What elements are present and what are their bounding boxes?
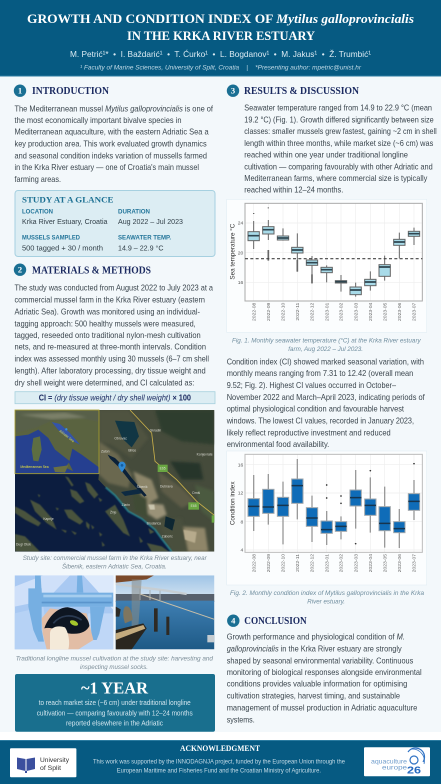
x axis labels: 2023-06 <box>397 302 403 321</box>
text: conclusion paragraph: shaped by seasonal environmental variability. Continuous <box>227 656 413 665</box>
boxes <box>248 227 420 295</box>
location pin <box>118 462 126 472</box>
acknowledgment text: This work was supported by the INNODAGNJA project, funded by the European Union through the <box>93 758 345 765</box>
text: conclusion paragraph: galloprovincialis in the Krka River estuary are strongly <box>227 644 403 653</box>
place labels: Brodarica <box>147 521 161 525</box>
text: conclusion paragraph: management of mussel production in Adriatic aquaculture <box>227 703 418 712</box>
x axis labels: 2023-05 <box>382 554 388 572</box>
text: conclusion paragraph: cultivation strategies, harvest timing, and sustainable <box>227 692 400 701</box>
text: results paragraph: reached within 12–24 months. <box>244 186 343 195</box>
caption: figure 2 <box>230 590 424 605</box>
x axis labels: 2023-03 <box>353 302 359 321</box>
x axis labels: 2022-12 <box>310 554 316 572</box>
text: introduction paragraph: The Mediterranean mussel Mytilus galloprovincialis is one of <box>14 104 214 113</box>
callout text: to reach market size (~6 cm) under traditional longline <box>39 698 191 707</box>
text: condition index paragraph: windows. The lowest CI values, recorded in January 2023, <box>226 416 414 425</box>
x axis labels: 2022-10 <box>281 554 287 572</box>
place labels <box>16 429 213 547</box>
x axis labels: 2022-08 <box>251 554 257 572</box>
place labels: Zaton <box>101 449 110 453</box>
callout text: reported elsewhere in the Adriatic <box>66 718 163 727</box>
place labels: Zaboric <box>162 534 173 538</box>
map: study site <box>15 410 216 552</box>
roads <box>130 410 214 515</box>
callout figure: ~1 YEAR <box>81 678 149 698</box>
text: conclusion paragraph: Growth performance and physiological condition of M. <box>227 633 405 642</box>
caption: figure 1: farm, Aug 2022 – Jul 2023. <box>288 346 363 353</box>
logo: Aquaculture Europe 26 <box>364 747 430 776</box>
section 4: conclusion <box>227 614 422 724</box>
text: methods paragraph: nets, and re-measured at three-month intervals. Condition <box>14 343 206 352</box>
glance: mussels sampled: 500 tagged + 30 / month <box>22 244 103 253</box>
y axis labels: 12 <box>238 491 244 497</box>
text: introduction paragraph: key production area. This work evaluated growth dynamics <box>14 140 207 149</box>
text: condition index paragraph: Condition index (CI) showed marked seasonal variation, with <box>227 357 424 366</box>
caption: figure 2: River estuary. <box>307 598 345 605</box>
glance: duration: Aug 2022 – Jul 2023 <box>118 217 183 226</box>
text: introduction paragraph: in the Krka River estuary — one of Croatia's main mussel <box>14 163 199 172</box>
medians <box>248 230 420 290</box>
glance: mussels sampled: MUSSELS SAMPLED <box>22 235 81 241</box>
caption: cultivation photos <box>16 656 213 671</box>
icon: swirl <box>408 748 425 764</box>
whiskers and outliers <box>254 207 414 297</box>
callout: time to market size <box>15 674 215 732</box>
fingertip <box>50 626 69 649</box>
glance title: STUDY AT A GLANCE <box>22 195 114 205</box>
place labels: Dugi Otok <box>16 543 31 547</box>
text: introduction paragraph: the most economically important bivalve species in <box>14 116 182 125</box>
section 3: results and discussion <box>227 84 437 195</box>
panel: figure 2 condition index chart <box>227 451 427 585</box>
y axis labels: Condition index <box>229 481 236 525</box>
map inset: Italy and Adriatic: Adriatic Sea <box>58 429 75 443</box>
photo: mussel line at the farm <box>116 575 214 649</box>
heading: materials and methods: 2 <box>18 265 22 275</box>
text: conclusion paragraph: systems. <box>227 715 255 724</box>
text: condition index paragraph: November 2022 and March–April 2023, indicating periods of <box>227 393 425 402</box>
caption: figure 1: Fig. 1. Monthly seawater temperature (°C) at the Krka River estuary <box>232 337 421 345</box>
place labels: Skradin <box>150 429 161 433</box>
y axis labels: 16 <box>238 280 244 286</box>
x axis labels: 2022-10 <box>281 302 287 321</box>
bridge <box>116 584 187 594</box>
heading: conclusion: 4 <box>231 616 236 626</box>
text: methods paragraph: length). After laboratory processing, dry tissue weight and <box>14 366 206 375</box>
caption: cultivation photos: Traditional longline mussel cultivation at the study site: harvesting and <box>16 656 213 663</box>
land texture <box>99 410 214 552</box>
heading: conclusion <box>227 614 307 627</box>
glance: duration: DURATION <box>118 210 150 216</box>
place labels: Zlarin <box>122 503 130 507</box>
place labels: Drniš <box>192 491 200 495</box>
text: methods paragraph: tagging approach: 500 healthy mussels were measured, <box>14 319 196 328</box>
text: condition index paragraph: monthly means ranging from 7.31 to 12.42 (overall mean <box>227 369 414 378</box>
formula box: CI = (dry tissue weight / dry shell weight) × 100 <box>39 393 192 402</box>
section 2: materials and methods <box>14 264 215 404</box>
acknowledgment text: European Maritime and Fisheries Fund and the Croatian Ministry of Agriculture. <box>117 768 321 775</box>
road badges: E65 <box>191 504 197 508</box>
title: GROWTH AND CONDITION INDEX OF Mytilus galloprovincialis <box>27 12 414 26</box>
text: methods paragraph: index was assessed monthly using 30 mussels (6–7 cm shell <box>14 355 209 364</box>
place labels: Žirje <box>110 510 117 515</box>
footer: acknowledgment <box>0 740 441 784</box>
logo: Aquaculture Europe 26: 26 <box>407 766 422 776</box>
glance: duration <box>118 210 183 226</box>
logo: Aquaculture Europe 26: aquaculture <box>371 758 407 766</box>
callout text: cultivation — comparing favourably with 12–24 months <box>37 708 193 717</box>
caliper <box>28 575 113 642</box>
x axis labels <box>251 554 418 572</box>
title: IN THE KRKA RIVER ESTUARY <box>127 29 315 43</box>
x axis labels: 2023-02 <box>339 554 345 572</box>
formula box <box>15 392 215 404</box>
glance: seawater temperature: 14.9 – 22.9 °C <box>118 244 164 253</box>
place labels: Kaprije <box>43 517 54 521</box>
caption: study site: Šibenik, eastern Adriatic Sea, Croatia. <box>62 561 167 570</box>
x axis labels: 2023-01 <box>324 554 330 572</box>
caption: figure 1 <box>232 337 421 353</box>
x axis labels: 2023-07 <box>412 554 418 572</box>
x axis labels: 2022-11 <box>295 554 301 572</box>
affiliations: ¹ Faculty of Marine Sciences, University of Split, Croatia | *Presenting author: mpetric@unist.hr <box>80 66 362 72</box>
x axis labels: 2022-09 <box>266 302 272 321</box>
text: introduction paragraph <box>14 104 214 184</box>
text: methods paragraph: Adriatic Sea). Growth was monitored using an individual- <box>14 307 200 316</box>
text: condition index paragraph: environmental food availability. <box>227 440 329 449</box>
road badges <box>158 465 216 523</box>
logo: University of Split <box>10 748 76 777</box>
x axis labels: 2023-02 <box>339 302 345 321</box>
y axis labels: 20 <box>238 250 244 256</box>
x axis labels: 2022-09 <box>266 554 272 572</box>
x axis labels: 2023-07 <box>412 302 418 321</box>
place labels: Dubrava <box>160 484 173 488</box>
medians <box>248 486 420 530</box>
x axis labels: 2022-11 <box>295 302 301 321</box>
glance: location: Krka River Estuary, Croatia <box>22 217 108 226</box>
y axis labels: 8 <box>241 519 244 525</box>
fingers <box>42 608 93 649</box>
section 1: introduction <box>14 84 214 184</box>
title <box>27 12 414 43</box>
text: conclusion paragraph <box>227 633 422 724</box>
glance: location: LOCATION <box>22 210 53 216</box>
posts <box>154 608 158 632</box>
panel: figure 1 seawater temperature chart <box>227 199 427 332</box>
text: conclusion paragraph: conditions provides valuable information for optimising <box>227 680 408 689</box>
mean line <box>245 257 422 260</box>
islands <box>15 476 169 552</box>
logo: University of Split: University <box>40 757 70 764</box>
lake and river <box>115 421 139 447</box>
boat canopy <box>116 575 154 583</box>
sea <box>15 474 172 552</box>
x axis labels: 2023-01 <box>324 302 330 321</box>
text: condition index paragraph: likely reflect reproductive investment and reduced <box>227 428 391 437</box>
text: condition index paragraph: 9.52; Fig. 2). Highest CI values occurred in October– <box>227 381 396 390</box>
text: methods paragraph: tagged, reseeded onto traditional nylon-mesh cultivation <box>14 331 201 340</box>
x axis labels: 2022-08 <box>251 302 257 321</box>
y axis labels: Sea temperature °C <box>228 223 236 280</box>
text: results paragraph <box>244 104 437 195</box>
outliers <box>326 463 415 544</box>
heading: results and discussion: 3 <box>231 86 235 96</box>
caption: cultivation photos: inspecting mussel socks. <box>80 664 148 671</box>
x axis labels: 2023-04 <box>368 302 374 321</box>
caption: figure 2: Fig. 2. Monthly condition index of Mytilus galloprovincialis in the Krka <box>230 590 424 597</box>
boxes <box>248 479 420 533</box>
text: methods paragraph <box>14 283 213 387</box>
mussel shell <box>44 607 89 634</box>
text: condition index paragraph <box>226 357 425 449</box>
heading: results and discussion: RESULTS & DISCUSSION <box>244 86 359 97</box>
road badges: E65 <box>160 466 166 470</box>
x axis labels <box>251 302 418 321</box>
panel: study at a glance <box>15 190 215 256</box>
x axis labels: 2022-12 <box>310 302 316 321</box>
glance: mussels sampled <box>22 235 103 253</box>
heading: materials and methods <box>14 264 151 276</box>
x axis labels: 2023-04 <box>368 554 374 572</box>
map inset: Italy and Adriatic <box>15 410 99 474</box>
callout text <box>37 698 193 727</box>
x axis labels: 2023-05 <box>382 302 388 321</box>
heading: conclusion: CONCLUSION <box>244 616 307 627</box>
glance: location <box>22 210 108 226</box>
logo: University of Split: of Split <box>40 765 61 772</box>
y axis labels: 4 <box>241 548 244 554</box>
whiskers <box>254 459 414 548</box>
place labels: Konjevrate <box>197 453 213 457</box>
icon: open book <box>17 758 35 773</box>
place labels: Obrovac <box>114 436 127 440</box>
text: methods paragraph: commercial mussel farm in the Krka River estuary (eastern <box>14 295 205 304</box>
text: methods paragraph: dry shell weight were determined, and CI calculated as: <box>14 378 194 387</box>
text: condition index paragraph: optimal physiological condition and favourable harvest <box>227 405 405 414</box>
y axis labels <box>229 462 244 554</box>
heading: introduction: 1 <box>18 86 22 96</box>
text: introduction paragraph: and seasonal condition indeks variation of mussells farmed <box>14 151 207 160</box>
acknowledgment text <box>93 758 345 775</box>
text: results paragraph: reached within one year under traditional longline <box>244 151 408 160</box>
y axis labels <box>228 221 244 286</box>
x axis labels: 2023-06 <box>397 554 403 572</box>
authors: M. Petrić¹* • I. Baždarić¹ • T. Ćurko¹ • L. Bogdanov¹ • M. Jakus¹ • Ž. Trumbić¹ <box>70 49 371 59</box>
tag <box>70 620 78 626</box>
heading: materials and methods: MATERIALS & METHODS <box>32 266 151 276</box>
place labels: Šibenik <box>137 484 148 489</box>
text: conclusion paragraph: monitoring of biological responses alongside environmental <box>227 668 422 677</box>
text: introduction paragraph: farming areas. <box>14 175 61 184</box>
text: methods paragraph: The study was conducted from August 2022 to July 2023 at a <box>14 283 213 292</box>
text: introduction paragraph: Mediterranean aquaculture, with the eastern Adriatic Sea a <box>14 128 209 137</box>
place labels: Bilice <box>128 448 136 452</box>
acknowledgment heading: ACKNOWLEDGMENT <box>180 744 261 753</box>
glance: seawater temperature: SEAWATER TEMP. <box>118 235 171 241</box>
heading: introduction <box>14 84 109 97</box>
logo: Aquaculture Europe 26: europe <box>382 764 408 772</box>
map inset: Italy and Adriatic: Mediterranean Sea <box>20 465 49 469</box>
y axis labels: 24 <box>238 221 244 227</box>
photo: mussel measured with caliper <box>15 575 113 649</box>
caption: study site <box>23 555 207 570</box>
x axis labels: 2023-03 <box>353 554 359 572</box>
y axis labels: 16 <box>238 462 244 468</box>
heading: introduction: INTRODUCTION <box>32 86 109 97</box>
glance: seawater temperature <box>118 235 171 253</box>
caption: study site: Study site: commercial mussel farm in the Krka River estuary, near <box>23 555 207 562</box>
header banner <box>0 0 441 76</box>
